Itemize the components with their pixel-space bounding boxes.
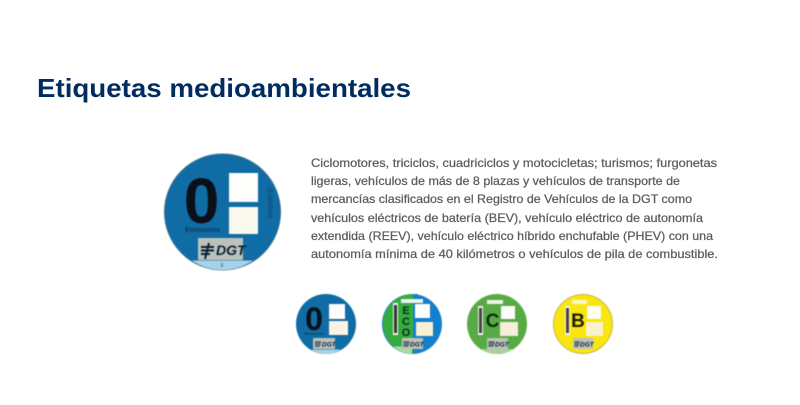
small badge: ECO: O [402, 327, 411, 339]
small badge: ECO: C [402, 316, 410, 328]
large badge: 0 Emisiones: 6 [221, 263, 224, 269]
small badge: B: B [571, 311, 585, 332]
small badge: 0: Emisiones [304, 332, 324, 336]
description text [311, 156, 718, 261]
small badge: 0: 0 [305, 301, 323, 337]
description text: extendida (REEV), vehículo eléctrico híbrido enchufable (PHEV) con una [311, 229, 713, 243]
small badge: B [554, 294, 612, 354]
description text: mercancías clasificados en el Registro de Vehículos de la DGT como [311, 192, 692, 206]
small badge: C: C [486, 311, 500, 332]
small badge: 0: DGT [322, 342, 337, 348]
large badge: 0 Emisiones: 0 [184, 165, 219, 237]
description text: Ciclomotores, triciclos, cuadriciclos y motocicletas; turismos; furgonetas [311, 156, 717, 170]
small badge: 0 [296, 294, 356, 354]
small badge: B: DGT [580, 342, 595, 348]
small badge: ECO: E [402, 305, 410, 317]
description text: ligeras, vehículos de más de 8 plazas y vehículos de transporte de [311, 174, 680, 188]
title: Etiquetas medioambientales [37, 73, 411, 103]
small badge: ECO: DGT [410, 342, 425, 348]
description text: autonomía mínima de 40 kilómetros o vehículos de pila de combustible. [311, 247, 718, 261]
large badge: 0 Emisiones: 11-0000001 [266, 187, 272, 219]
small badge: ECO [382, 294, 442, 354]
large badge: 0 Emisiones: Emisiones [185, 227, 220, 234]
large badge: 0 Emisiones: DGT [216, 242, 247, 258]
small badge: C: DGT [495, 342, 510, 348]
large badge: 0 Emisiones [164, 154, 280, 270]
small badge: C [467, 294, 527, 354]
description text: vehículos eléctricos de batería (BEV), vehículo eléctrico de autonomía [311, 211, 703, 225]
